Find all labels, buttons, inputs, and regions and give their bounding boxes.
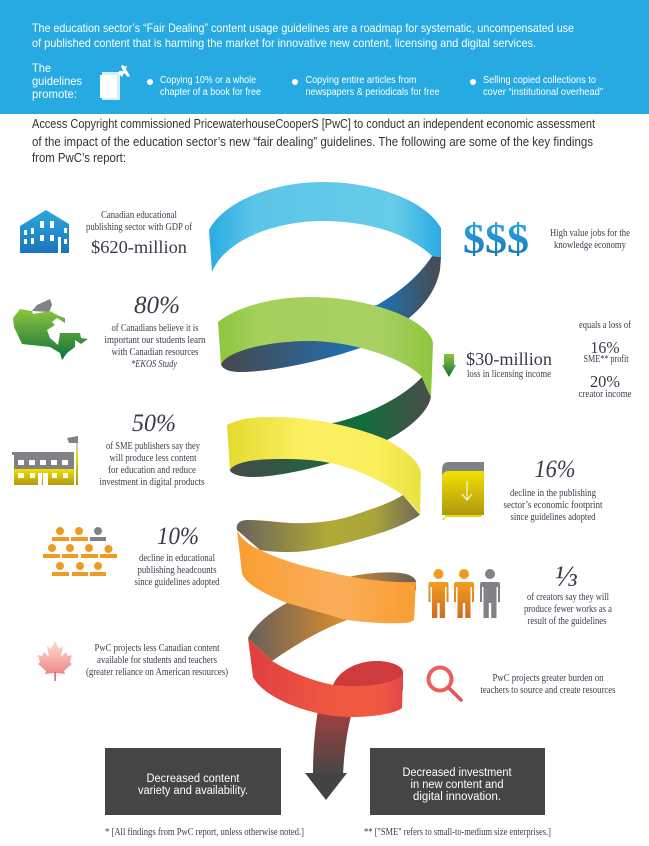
icon: maple leaf bbox=[38, 641, 72, 681]
text: less Canadian content: (greater reliance on American resources) bbox=[86, 667, 228, 678]
text: 10% bbox=[134, 523, 220, 588]
ribbon: orange bbox=[237, 530, 416, 661]
text: high value jobs bbox=[550, 228, 630, 251]
bullet: selling collections bbox=[470, 75, 603, 98]
text: greater burden bbox=[480, 673, 616, 696]
box: decreased investment: Decreased investment bbox=[402, 767, 512, 779]
text: 50%: for education and reduce bbox=[108, 465, 196, 476]
guidelines promote label: guidelines bbox=[32, 74, 82, 88]
box: decreased content: variety and availability. bbox=[138, 785, 248, 797]
icon: copied pages with giraffe bbox=[100, 65, 130, 100]
text: 16% footprint: since guidelines adopted bbox=[510, 512, 596, 523]
text: equals a loss of: creator income bbox=[578, 389, 632, 400]
text: less Canadian content bbox=[86, 643, 228, 678]
intro text: of the impact of the education sector’s new “fair dealing” guidelines. The following are some of the key findings bbox=[32, 135, 593, 149]
icon: $$$: $$$ bbox=[463, 217, 529, 263]
text: greater burden: PwC projects greater burden on bbox=[492, 673, 604, 684]
box: decreased content: Decreased content bbox=[146, 773, 240, 785]
spiral ribbon bbox=[209, 182, 441, 800]
text: 50%: investment in digital products bbox=[100, 477, 204, 488]
text: 10%: publishing headcounts bbox=[138, 565, 216, 576]
text: one third: produce fewer works as a bbox=[524, 604, 612, 615]
text: 50%: 50% bbox=[132, 410, 176, 437]
text: one third: ⅓ bbox=[555, 560, 578, 593]
text: one third: of creators say they will bbox=[527, 592, 609, 603]
bullet: copying articles: newspapers & periodicals for free bbox=[306, 87, 440, 98]
intro text bbox=[32, 117, 595, 165]
ribbon: blue bbox=[209, 182, 441, 372]
text: equals a loss of: equals a loss of bbox=[579, 320, 631, 331]
bullet: selling collections: Selling copied collections to bbox=[483, 75, 596, 86]
text: 10%: 10% bbox=[157, 523, 199, 550]
intro text: from PwC’s report: bbox=[32, 151, 126, 165]
guidelines promote label: promote: bbox=[32, 87, 77, 101]
ribbon: yellow bbox=[227, 417, 421, 552]
text: 16% footprint bbox=[504, 456, 603, 523]
text: GDP: publishing sector with GDP of bbox=[86, 222, 192, 233]
text: $30-million bbox=[466, 349, 552, 380]
icon: Canada map bbox=[13, 299, 88, 360]
icon: three people bbox=[428, 569, 500, 618]
text: 16% footprint: decline in the publishing bbox=[510, 488, 597, 499]
text: 80%: of Canadians believe it is bbox=[112, 323, 198, 334]
bullet: copying 10%: chapter of a book for free bbox=[160, 87, 261, 98]
text: 80%: 80% bbox=[134, 292, 180, 319]
header statement bbox=[32, 21, 574, 50]
icon: school bbox=[12, 436, 78, 485]
text: one third: result of the guidelines bbox=[528, 616, 606, 627]
text: 50% bbox=[100, 410, 204, 488]
text: 80%: *EKOS Study bbox=[131, 359, 177, 370]
box: decreased investment bbox=[370, 748, 545, 815]
text: less Canadian content: PwC projects less Canadian content bbox=[94, 643, 220, 654]
bullet: selling collections: cover “institutional overhead” bbox=[483, 87, 603, 98]
text: $30-million: loss in licensing income bbox=[467, 369, 551, 380]
text: 50%: of SME publishers say they bbox=[106, 441, 201, 452]
text: 80% bbox=[104, 292, 206, 370]
ribbon: green bbox=[218, 297, 433, 477]
text: 80%: important our students learn bbox=[104, 335, 206, 346]
icon: book with down arrow bbox=[442, 462, 484, 520]
text: 16% footprint: 16% bbox=[534, 456, 576, 483]
text: equals a loss of: 16% bbox=[590, 338, 620, 357]
text: 10%: decline in educational bbox=[139, 553, 215, 564]
header banner bbox=[0, 0, 649, 114]
text: equals a loss of bbox=[578, 320, 632, 400]
ribbon: red with arrow bbox=[248, 638, 403, 800]
text: GDP: Canadian educational bbox=[101, 210, 177, 221]
text: 16% footprint: sector’s economic footprint bbox=[504, 500, 603, 511]
footnote: SME: ** ["SME" refers to small-to-medium size enterprises.] bbox=[364, 827, 551, 838]
text: GDP: $620-million bbox=[91, 237, 187, 257]
text: 50%: will produce less content bbox=[110, 453, 197, 464]
header statement: The education sector’s “Fair Dealing” content usage guidelines are a roadmap for systematic, uncompensated use bbox=[32, 21, 574, 35]
box: decreased investment: digital innovation. bbox=[413, 791, 501, 803]
box: decreased content bbox=[105, 748, 281, 815]
icon: magnifying glass bbox=[428, 668, 461, 700]
text: $30-million: $30-million bbox=[466, 349, 552, 369]
bullet: copying articles bbox=[292, 75, 440, 98]
icon: green down arrow bbox=[442, 354, 456, 377]
box: decreased investment: in new content and bbox=[410, 779, 504, 791]
text: GDP bbox=[86, 210, 192, 257]
footnote: findings: * [All findings from PwC report, unless otherwise noted.] bbox=[105, 827, 304, 838]
text: 80%: with Canadian resources bbox=[112, 347, 198, 358]
text: high value jobs: High value jobs for the bbox=[550, 228, 630, 239]
text: greater burden: teachers to source and create resources bbox=[480, 685, 616, 696]
text: 10%: since guidelines adopted bbox=[134, 577, 220, 588]
icon: blue building bbox=[20, 210, 69, 253]
icon: audience of people bbox=[43, 527, 117, 576]
bullet: copying articles: Copying entire articles from bbox=[306, 75, 416, 86]
guidelines promote label: The bbox=[32, 61, 51, 75]
bullet: copying 10% bbox=[147, 75, 261, 98]
text: equals a loss of: SME** profit bbox=[584, 354, 629, 365]
text: one third bbox=[524, 560, 612, 627]
text: high value jobs: knowledge economy bbox=[554, 240, 627, 251]
text: less Canadian content: available for students and teachers bbox=[97, 655, 217, 666]
bullet: copying 10%: Copying 10% or a whole bbox=[160, 75, 256, 86]
header statement: of published content that is harming the market for innovative new content, licensing and digital services. bbox=[32, 36, 536, 50]
guidelines promote label bbox=[32, 61, 82, 101]
text: equals a loss of: 20% bbox=[590, 372, 620, 391]
